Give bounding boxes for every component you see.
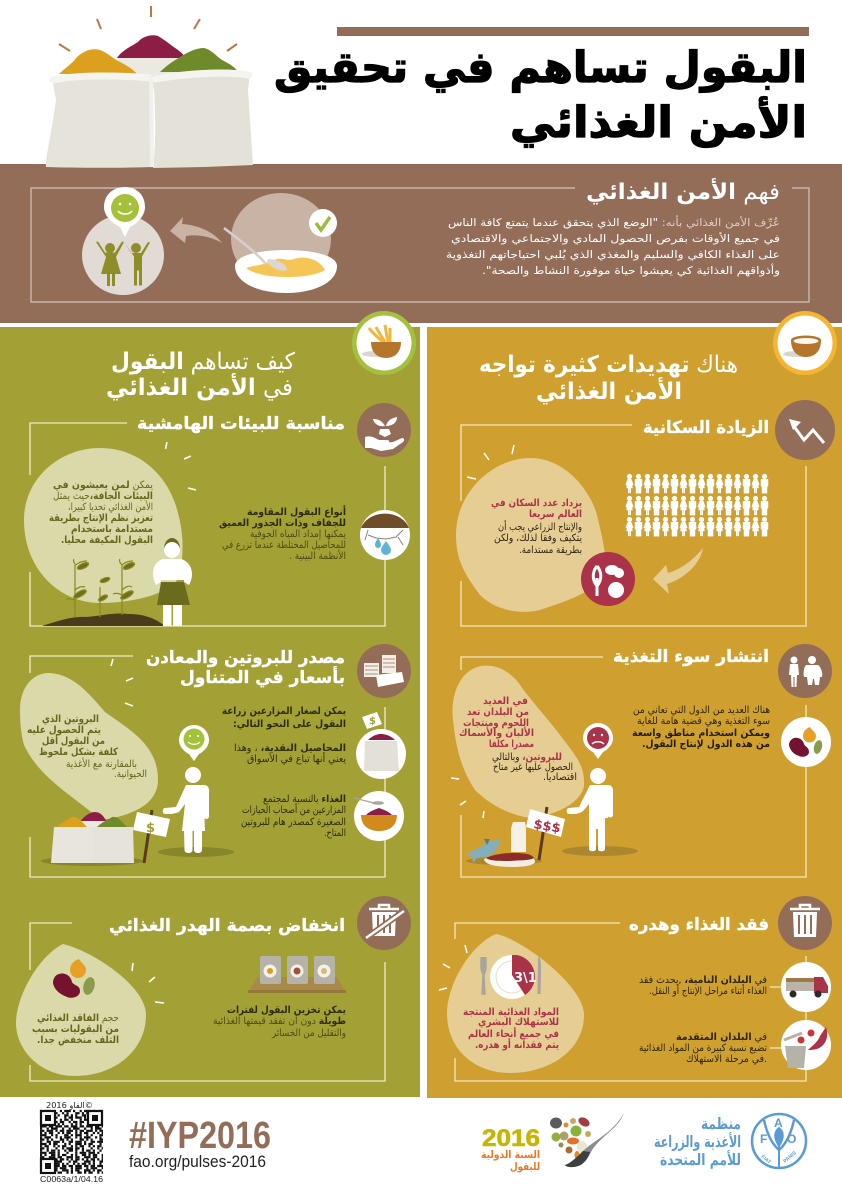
text: developing countries: الغذاء أثناء مراحل الإنتاج أو النقل. xyxy=(649,984,767,997)
text: smallholder farmers: المزارعين من أصحاب الحيازات xyxy=(242,803,346,816)
heading: how pulses contribute xyxy=(106,349,295,401)
logo: FAO: منظمة xyxy=(701,1115,741,1133)
section: population growth xyxy=(456,400,835,626)
blob with beans and text xyxy=(16,944,164,1076)
logo: FAO xyxy=(654,1114,806,1169)
blob with plate and text: يتم فقدانه أو هدره. xyxy=(475,1038,559,1051)
blob with beans and text: التلف منخفض جدا. xyxy=(37,1035,119,1046)
text: smallholder farmers: الغذاء بالنسبة لمجتمع xyxy=(263,794,346,805)
text: deep roots: للمحاصيل المختلطة عندما تزرع في xyxy=(222,540,346,551)
section heading: انخفاض بصمة الهدر الغذائي xyxy=(109,916,345,936)
panel: how pulses contribute xyxy=(0,311,420,1097)
heading: threats xyxy=(479,352,738,405)
blob with text: يمكن لمن يعيشون في xyxy=(53,480,153,491)
rays xyxy=(467,445,514,479)
illustration: plants and soil xyxy=(42,559,165,626)
icon: trash bin xyxy=(778,896,832,950)
text: malnutrition: هناك العديد من الدول التي تعاني من xyxy=(633,705,770,716)
definition text: وأذواقهم الغذائية كي يعيشوا حياة موفورة النشاط والصحة". xyxy=(482,263,780,277)
blob with plate and text: المواد الغذائية المنتجة xyxy=(463,1007,559,1018)
illustration: fish, meat, milk and price sign xyxy=(465,807,565,867)
blob with text xyxy=(451,666,584,818)
panel: understanding food security xyxy=(0,164,842,323)
section heading: الزيادة السكانية xyxy=(643,418,769,438)
text: developing countries: في البلدان النامية، ,يحدث فقد xyxy=(639,975,767,986)
section heading: مناسبة للبيئات الهامشية xyxy=(137,414,345,434)
section heading: بأسعار في المتناول xyxy=(180,666,345,688)
text: smallholder farmers xyxy=(222,706,346,839)
blob with text: يتكيف وفقا لذلك، ولكن xyxy=(494,533,582,544)
heading: understanding food security: فهم الأمن الغذائي xyxy=(586,177,780,205)
rays xyxy=(439,945,467,990)
blob with text: والإنتاج الزراعي يجب أن xyxy=(498,520,582,533)
icon: FAO emblem: FIAT xyxy=(760,1154,772,1165)
text: deep roots xyxy=(219,505,346,562)
blob with text: من البلدان تعد xyxy=(467,707,529,718)
blob with text: يزداد عدد السكان في xyxy=(491,498,582,509)
heading: how pulses contribute: في الأمن الغذائي xyxy=(106,372,293,401)
blob with plate and text xyxy=(439,934,584,1073)
blob with text: بالمقارنة مع الأغذية xyxy=(66,757,137,770)
arrow xyxy=(170,217,222,243)
blob with text: العالم سريعا xyxy=(529,509,582,520)
text: long storage xyxy=(213,1005,346,1039)
text: developing countries xyxy=(639,975,767,997)
illustration: fish, meat, milk and price sign: $$$ xyxy=(532,817,562,837)
text: malnutrition: من هذه الدول لإنتاج البقول. xyxy=(642,739,770,750)
icon: rising zigzag arrow xyxy=(775,400,835,460)
blob with plate and text: للاستهلاك البشري xyxy=(478,1017,559,1028)
text: deep roots: أنواع البقول المقاومة xyxy=(247,505,346,518)
illustration: person with sad bubble xyxy=(562,723,638,856)
logo: FAO: الأغذية والزراعة xyxy=(654,1132,741,1151)
blob with text: من البقول أقل xyxy=(42,734,105,747)
text: smallholder farmers: المحاصيل النقدية، ، وهذا xyxy=(234,743,346,754)
title: البقول تساهم في تحقيق xyxy=(274,43,807,93)
blob with beans and text: حجم الفاقد الغذائي xyxy=(37,1013,119,1024)
section: protein and minerals xyxy=(20,644,411,877)
section heading: فقد الغذاء وهدره xyxy=(629,915,769,935)
section: low food waste footprint xyxy=(16,896,411,1081)
blob with text xyxy=(456,445,606,612)
blob with text: اللحوم ومنتجات xyxy=(463,718,529,729)
arrow xyxy=(653,548,703,594)
qr code reference: C0063a/1/04.16 xyxy=(40,1175,104,1184)
blob with text xyxy=(24,442,196,603)
icon: sack with price xyxy=(356,712,406,816)
icon: plate chart one third xyxy=(481,955,541,999)
icon: beans circle xyxy=(781,717,831,767)
illustration: sacks of pulses xyxy=(46,6,253,168)
text: developed countries: تضيع نسبة كبيرة من المواد الغذائية xyxy=(639,1043,767,1054)
illustration: girl xyxy=(153,538,192,626)
text: smallholder farmers: البقول على النحو التالي: xyxy=(233,719,346,730)
icon: waste bin with food xyxy=(781,1020,831,1070)
section: food loss and waste xyxy=(439,896,832,1081)
section heading: انتشار سوء التغذية xyxy=(613,647,769,667)
blob with text: تعزيز نظم الإنتاج بطريقة xyxy=(49,513,153,524)
text: deep roots: للجفاف وذات الجذور العميق xyxy=(219,518,346,529)
text: deep roots: يمكنها إمداد المياه الجوفية xyxy=(250,529,346,540)
text: smallholder farmers: الصغيرة كمصدر هام للبروتين xyxy=(241,817,346,828)
blob with text: البيئات الجافة،حيث يمثل xyxy=(53,491,153,502)
icon: sack with price: $ xyxy=(369,716,376,727)
section: marginal environments xyxy=(24,403,411,626)
illustration: sacks with price sign xyxy=(41,810,170,866)
icon: truck xyxy=(770,962,831,1048)
blob with plate and text: في جميع أنحاء العالم xyxy=(468,1027,559,1040)
blob with text: للبروتين، وبالتالي xyxy=(492,752,562,763)
title bar xyxy=(337,27,809,36)
illustration: storage cans on shelf xyxy=(248,956,346,993)
blob with text: يتم الحصول عليه xyxy=(27,725,101,736)
icon: bowl with spoon xyxy=(354,791,404,841)
logo: international year of pulses: للبقول xyxy=(510,1161,540,1173)
text: malnutrition: سوء التغذية وهي قضية هامة للغاية xyxy=(637,716,770,727)
blob with text: الألبان والأسماك xyxy=(459,726,534,739)
icon: thin and overweight figures xyxy=(778,644,832,698)
icon: FAO emblem xyxy=(752,1114,806,1168)
hashtag: #IYP2016 xyxy=(129,1115,271,1157)
section: malnutrition xyxy=(451,644,832,877)
icon: beans xyxy=(53,959,97,998)
blob with text: مصدرا مكلفا xyxy=(489,739,534,750)
text: deep roots: الأنظمة البينية . xyxy=(289,549,346,562)
blob with text: الحصول عليها غير متاح xyxy=(493,762,573,773)
blob with text: الحيوانية. xyxy=(114,769,147,780)
icon: food circle xyxy=(581,552,635,606)
icon: FAO emblem: A xyxy=(774,1116,783,1130)
text: long storage: يمكن تخزين البقول لفترات xyxy=(227,1005,346,1016)
qr code xyxy=(40,1111,103,1173)
blob with text: في العديد xyxy=(483,696,528,707)
illustration: person with happy bubble xyxy=(158,725,234,857)
text: developed countries: .في مرحلة الاستهلاك xyxy=(686,1054,767,1065)
logo: international year of pulses: 2016 xyxy=(482,1125,540,1152)
rays xyxy=(166,442,196,490)
blob with text: كلفة بشكل ملحوظ xyxy=(39,747,118,758)
people grid xyxy=(626,474,768,536)
section heading xyxy=(146,648,345,688)
blob with text: الأمن الغذائي تحديا كبيرا، xyxy=(68,500,153,513)
heading: how pulses contribute: كيف تساهم البقول xyxy=(111,349,295,375)
icon: plate chart one third: 3\1 xyxy=(514,971,537,986)
text: malnutrition xyxy=(632,705,770,750)
heading: threats: هناك تهديدات كثيرة تواجه xyxy=(479,352,738,378)
logo: international year of pulses: السنة الدولية xyxy=(481,1149,540,1161)
rays xyxy=(451,778,484,818)
icon: happy people xyxy=(82,187,164,295)
blob with text: اقتصاديا. xyxy=(543,772,577,783)
icon: roots and water xyxy=(360,510,410,560)
icon: crossed bin xyxy=(357,896,411,950)
text: developed countries: في البلدان المتقدمة xyxy=(676,1032,767,1043)
rays xyxy=(111,659,133,706)
definition text: في جميع الأوقات بفرص الحصول المادي والاجتماعي والاقتصادي xyxy=(451,232,780,245)
heading: threats: الأمن الغذائي xyxy=(536,376,682,405)
blob with text: البقول المكيفة محليا. xyxy=(61,535,153,546)
blob with text: البروتين الذي xyxy=(42,714,99,725)
text: smallholder farmers: يعني أنها تباع في الأسواق xyxy=(247,752,346,765)
icon: bowl with check mark xyxy=(224,193,337,293)
logo: FAO: للأمم المتحدة xyxy=(660,1150,741,1169)
definition text: عُرِّف الأمن الغذائي بأنه: "الوضع الذي يتحقق عندما يتمتع كافة الناس xyxy=(448,215,780,229)
icon: coins and banknotes xyxy=(357,644,411,698)
icon: FAO emblem: F xyxy=(760,1132,767,1146)
rays xyxy=(132,963,164,1003)
text: long storage: والتقليل من الخسائر xyxy=(271,1028,346,1039)
icon: FAO emblem: O xyxy=(787,1132,796,1146)
blob with text: مستدامة باستخدام xyxy=(71,524,153,535)
icon: plant in hand xyxy=(357,403,411,457)
title xyxy=(274,43,807,148)
text: smallholder farmers: يمكن لصغار المزارعين زراعة xyxy=(222,706,346,717)
panel: threats to food security xyxy=(427,311,842,1098)
icon: pulses and spoon xyxy=(550,1113,624,1167)
footer: copyright: ©الفاو 2016 xyxy=(46,1101,93,1110)
blob with text: بطريقة مستدامة. xyxy=(519,545,582,556)
title: الأمن الغذائي xyxy=(510,96,807,148)
icon: bowl badge xyxy=(773,311,837,375)
illustration: sacks with price sign: $ xyxy=(146,821,155,836)
website: fao.org/pulses-2016 xyxy=(129,1152,266,1171)
blob with beans and text: من البقوليات بسبب xyxy=(32,1024,119,1035)
definition text: على الغذاء الكافي والسليم والمغذي الذي يُلبي احتياجاتهم التغذوية xyxy=(446,249,780,261)
section heading: مصدر للبروتين والمعادن xyxy=(146,648,345,668)
icon: wheat bowl badge xyxy=(352,311,416,375)
text: developed countries xyxy=(639,1032,767,1065)
logo: international year of pulses xyxy=(481,1113,624,1173)
blob with text xyxy=(20,659,158,820)
text: smallholder farmers: المتاح. xyxy=(324,828,346,839)
definition text xyxy=(446,215,780,277)
text: long storage: طويلة دون أن تفقد قيمتها الغذائية xyxy=(213,1014,346,1027)
text: malnutrition: ويمكن استخدام مناطق واسعة xyxy=(632,728,770,739)
icon: FAO emblem: PANIS xyxy=(782,1150,798,1165)
